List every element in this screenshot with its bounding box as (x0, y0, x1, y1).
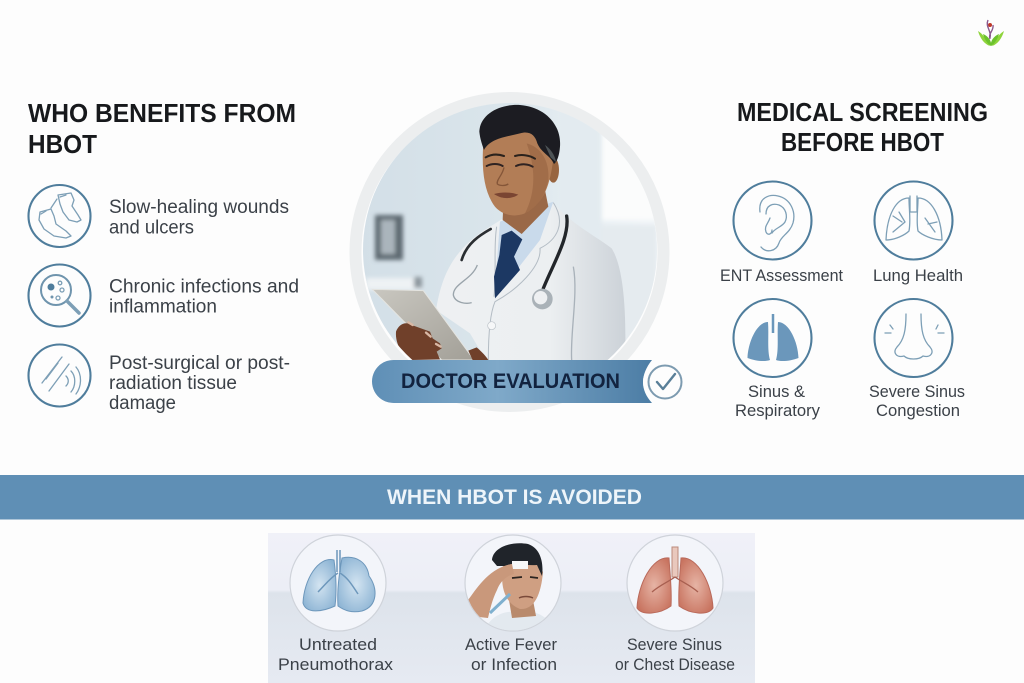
brows and eyes (486, 155, 535, 159)
label: sinus respiratory: Sinus & (748, 383, 805, 401)
icon: magnifier with microbes (28, 264, 90, 326)
panel: doctor portrait (356, 98, 687, 406)
heading: medical screening (737, 97, 988, 157)
heading: who benefits: HBOT (28, 129, 97, 159)
icon: check badge (643, 360, 687, 404)
hair (479, 105, 560, 164)
face (483, 130, 553, 215)
label: untreated pneumothorax (278, 636, 394, 674)
panel: screening icons (720, 182, 965, 420)
ear (548, 157, 559, 183)
label: active fever (465, 636, 557, 674)
panel: who benefits list (28, 185, 299, 414)
label: severe sinus or chest disease: Severe Sinus (627, 636, 722, 654)
tablet (372, 289, 474, 360)
text: post-surgical: damage (109, 393, 176, 414)
label: severe sinus or chest disease (615, 636, 735, 674)
label: lung health: Lung Health (873, 267, 963, 285)
icon: man with fever (465, 535, 561, 632)
logo (978, 20, 1004, 46)
label: severe sinus or chest disease: or Chest Disease (615, 656, 735, 674)
white coat (436, 203, 625, 362)
hair (492, 543, 542, 576)
shirt (488, 612, 545, 630)
panel: contraindications (268, 533, 755, 683)
banner: doctor evaluation: DOCTOR EVALUATION (401, 369, 620, 393)
icon: tissue and radiation waves (28, 344, 90, 406)
icon: ear (734, 182, 812, 260)
label: severe sinus congestion: Congestion (876, 402, 960, 420)
shirt (496, 202, 553, 268)
heading: medical screening: MEDICAL SCREENING (737, 97, 988, 127)
text: post-surgical (109, 353, 290, 414)
text: slow-healing wounds (109, 197, 289, 238)
photo ring (356, 98, 664, 406)
label: untreated pneumothorax: Untreated (299, 636, 377, 654)
icon: lung outline (874, 182, 952, 260)
neck and face (509, 600, 536, 618)
icon: solid lungs (734, 299, 812, 377)
label: active fever: Active Fever (465, 636, 557, 654)
neck (503, 190, 548, 234)
label: severe sinus congestion (869, 383, 965, 420)
text: slow-healing wounds: and ulcers (109, 218, 194, 238)
text: post-surgical: radiation tissue (109, 373, 237, 394)
text: post-surgical: Post-surgical or post- (109, 353, 290, 374)
mouth and nose (494, 192, 518, 198)
icon: feet (28, 185, 90, 247)
heading: who benefits: WHO BENEFITS FROM (28, 98, 296, 128)
band: when HBOT is avoided: WHEN HBOT IS AVOIDED (387, 486, 642, 509)
text: chronic infections (109, 276, 299, 318)
photo of doctor (363, 103, 657, 360)
band: when HBOT is avoided (0, 475, 1024, 520)
label: untreated pneumothorax: Pneumothorax (278, 656, 394, 674)
tie (494, 231, 522, 298)
label: active fever: or Infection (471, 656, 557, 674)
label: ENT: ENT Assessment (720, 267, 843, 285)
banner: doctor evaluation (372, 360, 687, 404)
heading: who benefits (28, 98, 296, 159)
fever patch (512, 561, 528, 569)
label: sinus respiratory (735, 383, 821, 420)
arm (468, 564, 514, 618)
text: chronic infections: inflammation (109, 296, 217, 318)
label: sinus respiratory: Respiratory (735, 402, 821, 420)
stethoscope (462, 229, 491, 260)
thermometer (490, 594, 510, 613)
text: slow-healing wounds: Slow-healing wounds (109, 197, 289, 218)
hands (396, 323, 442, 360)
label: severe sinus congestion: Severe Sinus (869, 383, 965, 401)
icon: pneumothorax lungs (290, 535, 386, 631)
text: chronic infections: Chronic infections and (109, 276, 299, 298)
icon: nose (874, 299, 952, 377)
icon: diseased lungs (627, 535, 723, 631)
heading: medical screening: BEFORE HBOT (781, 127, 944, 157)
